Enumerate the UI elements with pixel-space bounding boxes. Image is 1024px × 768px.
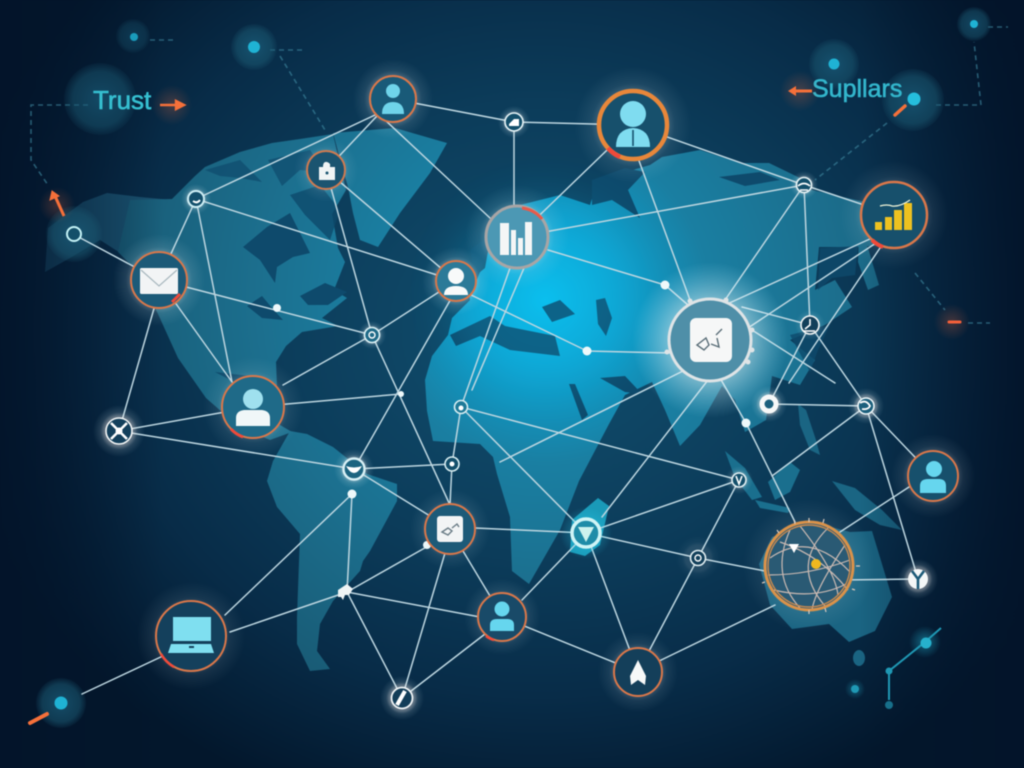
node: small ring far left: [67, 227, 81, 241]
node: small ring Indonesia: [725, 466, 753, 494]
node: large person top: [575, 67, 691, 183]
node: small ring Indian Ocean: [676, 536, 720, 580]
node: spiral ring: [358, 321, 386, 349]
node: small ring top middle: [498, 106, 530, 138]
continent: New Guinea: [832, 481, 902, 530]
node: bird ring: [334, 449, 374, 489]
node: drone: [93, 405, 145, 457]
node: large square icon: [632, 262, 788, 418]
node: small ring east Asia: [848, 388, 884, 424]
node: envelope: [113, 234, 205, 326]
continent: Japan: [858, 235, 879, 290]
continent: Borneo: [768, 462, 800, 500]
continent: Australia: [759, 522, 892, 642]
accent: orange dash bottom left: [30, 714, 47, 723]
arrow: left of Supllars: [780, 71, 820, 111]
node: person top centre: [353, 59, 433, 139]
continent: Greenland: [333, 128, 447, 247]
node: person lower centre: [464, 579, 540, 655]
central light glow: [450, 200, 640, 390]
node: white donut: [751, 386, 787, 422]
continent: Philippines: [798, 404, 820, 455]
continent: Madagascar: [570, 498, 609, 556]
node: cube icon: [410, 489, 490, 569]
label: Trust: Trust: [93, 85, 152, 115]
inland seas and channels: [205, 150, 858, 420]
decorative dashed leader lines: [31, 27, 1008, 323]
node: laptop: [137, 582, 245, 690]
continent: Eurasia and Africa: [425, 150, 885, 584]
continent: South America: [267, 431, 397, 671]
node: small ring upper left: [181, 184, 211, 214]
constellation bottom right: [845, 626, 941, 709]
node: person right: [891, 434, 975, 518]
node: clock ring: [795, 310, 825, 340]
node: bar chart centre: [465, 185, 569, 289]
label: Supllars: Supllars: [812, 75, 902, 103]
node: gold bar chart: [840, 161, 948, 269]
node: person Central America: [203, 357, 303, 457]
node: white mark on Argentina: [338, 584, 353, 600]
continent: North and Central America: [118, 134, 347, 440]
small link dots: [273, 280, 750, 549]
continent: Sumatra: [725, 451, 762, 500]
node: V shield ring: [560, 507, 612, 559]
node: small ring Africa west: [445, 457, 459, 471]
accent: orange marker right: [934, 304, 970, 340]
dark ocean notches: [215, 372, 268, 398]
continent: Java: [755, 500, 790, 513]
accent: orange dash near supplier disc: [895, 106, 905, 115]
arrow: right of Trust: [152, 85, 192, 125]
continent: Tasmania: [853, 650, 865, 666]
network connection lines: [73, 99, 933, 698]
node: small ring north Asia: [790, 171, 818, 199]
node: pen ring bottom: [380, 676, 424, 720]
world map: [45, 128, 902, 671]
continent: Alaska: [45, 193, 172, 272]
node: wire globe: [743, 500, 875, 632]
arrow: pointing up left: [39, 187, 75, 223]
node: lock: [294, 138, 358, 202]
node: small ring Africa north: [454, 400, 468, 414]
node: pie ring right: [898, 559, 938, 599]
node: arrow emblem: [598, 632, 678, 712]
node: person Europe: [422, 247, 490, 315]
